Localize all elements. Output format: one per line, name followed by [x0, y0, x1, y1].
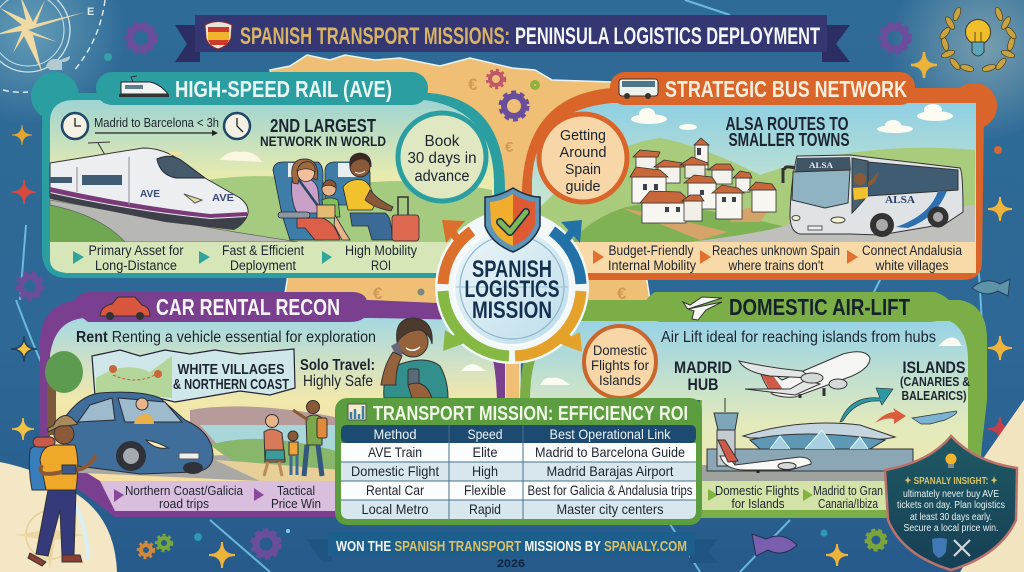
table: transport mission efficiency ROI: Madrid to Barcelona Guide [535, 444, 685, 460]
panel: strategic bus network [522, 72, 997, 280]
callout: Spanaly insight shield: tickets on day. Plan logistics [897, 500, 1005, 511]
routes heading: ALSA ROUTES TO [726, 114, 848, 134]
icon: small blue plane [912, 411, 957, 424]
feature strip: Madrid to Gran [813, 483, 883, 498]
table: transport mission efficiency ROI: Local Metro [362, 501, 429, 517]
illustration: white village [630, 138, 776, 223]
peninsula map backdrop [270, 55, 650, 400]
illustration: AVE train: AVE [140, 189, 160, 200]
feature strip: High Mobility [345, 243, 417, 258]
callout: getting around Spain guide [539, 114, 627, 202]
feature strip: Internal Mobility [608, 258, 696, 273]
icon: lightbulb with laurel [938, 6, 1018, 73]
hub label [674, 358, 732, 394]
compass rose [0, 0, 112, 92]
panel: high-speed rail [31, 72, 505, 278]
feature strip: Domestic Flights [715, 483, 799, 498]
peninsula map backdrop: € [373, 284, 383, 303]
illustration: family on train seats [273, 153, 419, 241]
header pill: STRATEGIC BUS NETWORK [665, 76, 907, 102]
peninsula map backdrop: € [617, 284, 627, 303]
callout: Spanaly insight shield [885, 436, 1017, 570]
feature strip: white villages [875, 258, 949, 273]
illustration: parked airplane [718, 440, 811, 473]
header pill: HIGH-SPEED RAIL (AVE) [175, 76, 392, 102]
islands label [900, 358, 970, 403]
feature strip [702, 481, 887, 511]
feature strip: Northern Coast/Galicia [125, 483, 244, 498]
callout: domestic flights for islands: Domestic [593, 343, 647, 358]
panel: domestic air-lift [520, 292, 987, 518]
callout: book 30 days: advance [414, 168, 470, 185]
illustration: airplane taking off [739, 352, 870, 398]
table: transport mission efficiency ROI [335, 398, 702, 525]
table: transport mission efficiency ROI: Domestic Flight [351, 463, 439, 479]
route label and arrow: Madrid to Barcelona < 3h [94, 115, 219, 130]
panel interior [532, 103, 976, 273]
callout: book 30 days [398, 113, 486, 201]
illustration: family pointing [264, 400, 327, 476]
illustration: AVE train: AVE [212, 193, 234, 204]
callout: getting around Spain guide: Spain [565, 161, 601, 178]
icon: clock left [62, 113, 88, 139]
route label and arrow [94, 115, 219, 136]
feature strip: Primary Asset for [88, 243, 184, 258]
peninsula map backdrop: € [505, 139, 514, 156]
feature strip: Connect Andalusia [862, 243, 962, 258]
callout: Spanaly insight shield: at least 30 days early. [910, 512, 992, 523]
title banner: SPANISH TRANSPORT MISSIONS: [240, 23, 510, 50]
feature strip: Fast & Efficient [222, 243, 304, 258]
center disc: SPANISH [472, 256, 552, 283]
feature strip: where trains don't [728, 258, 824, 273]
solo travel note: Solo Travel: [300, 357, 375, 374]
table: transport mission efficiency ROI: Rental Car [366, 482, 424, 498]
table: transport mission efficiency ROI: AVE Train [368, 444, 422, 460]
ring arcs [443, 231, 581, 356]
feature strip: for Islands [732, 496, 785, 511]
callout: book 30 days: 30 days in [408, 150, 476, 167]
central hub: Spanish logistics mission [435, 188, 589, 364]
solo travel note [300, 357, 375, 390]
feature strip: Canaria/Ibiza [818, 496, 879, 511]
illustration: man on phone [381, 318, 448, 398]
feature strip [560, 242, 976, 273]
illustration: AVE train [50, 142, 248, 230]
feature strip: Budget-Friendly [608, 243, 694, 258]
panel interior [50, 100, 494, 273]
table: transport mission efficiency ROI: Rapid [469, 501, 501, 517]
year: 2026 [497, 558, 525, 570]
callout: domestic flights for islands: Islands [599, 373, 641, 388]
header pill [96, 72, 428, 105]
feature strip: road trips [159, 496, 209, 511]
routes heading: SMALLER TOWNS [728, 130, 850, 150]
compass rose: E [87, 6, 94, 18]
table: transport mission efficiency ROI: Master city centers [556, 501, 664, 517]
icon: bus [619, 79, 658, 99]
table: transport mission efficiency ROI: Madrid Barajas Airport [546, 463, 674, 479]
arrow: red to islands [875, 408, 906, 424]
feature strip: Tactical [277, 483, 315, 498]
callout: getting around Spain guide: guide [566, 178, 600, 195]
callout: domestic flights for islands [584, 326, 656, 398]
icon: airplane [683, 297, 722, 320]
title banner: PENINSULA LOGISTICS DEPLOYMENT [515, 23, 820, 50]
illustration: airport terminal [707, 398, 913, 471]
network heading [260, 116, 386, 149]
callout: book 30 days: Book [424, 133, 460, 150]
header pill [644, 292, 952, 322]
illustration: folded map: & NORTHERN COAST [173, 376, 289, 393]
callout: Spanaly insight shield: ultimately never buy AVE [903, 489, 999, 500]
table: transport mission efficiency ROI: Flexible [464, 482, 506, 498]
hub label: MADRID [674, 358, 732, 377]
feature strip: ROI [371, 258, 391, 273]
panel interior [45, 318, 497, 481]
peninsula map backdrop: € [468, 75, 478, 94]
illustration: folded map [92, 349, 295, 402]
table: transport mission efficiency ROI: Best Operational Link [550, 426, 671, 442]
callout: Spanaly insight shield: ✦ SPANALY INSIGHT: ✦ [904, 475, 998, 487]
table: transport mission efficiency ROI: High [472, 463, 498, 479]
illustration: backpacker [28, 415, 96, 566]
network heading: NETWORK IN WORLD [260, 134, 386, 149]
panel: car rental recon [28, 292, 505, 566]
intro text: Air Lift ideal for reaching islands from hubs [661, 329, 936, 346]
center disc: MISSION [472, 297, 552, 324]
title banner [175, 15, 850, 62]
icon: red car [100, 297, 150, 320]
header pill [72, 292, 368, 322]
solo travel note: Highly Safe [303, 373, 373, 390]
header pill: CAR RENTAL RECON [156, 294, 340, 320]
icon: train [119, 76, 169, 97]
arrow: teal to islands [840, 388, 893, 422]
table heading: TRANSPORT MISSION: EFFICIENCY ROI [373, 403, 688, 425]
feature strip: Price Win [271, 496, 321, 511]
routes heading [726, 114, 850, 150]
network heading: 2ND LARGEST [270, 116, 376, 136]
table: transport mission efficiency ROI: Best for Galicia & Andalusia trips [528, 482, 692, 498]
icon: fish top right [972, 279, 1010, 296]
callout: getting around Spain guide: Around [560, 144, 606, 161]
feature strip: Reaches unknown Spain [712, 243, 840, 258]
illustration: blue car [63, 392, 213, 474]
header pill [610, 72, 915, 105]
illustration: folded map: WHITE VILLAGES [178, 361, 284, 378]
icon: chart [348, 404, 366, 420]
hub label: HUB [688, 375, 718, 394]
icon: shield with check [485, 188, 540, 252]
feature strip [100, 481, 340, 511]
icon: purple fish [752, 534, 797, 556]
callout: domestic flights for islands: Flights for [591, 358, 649, 373]
footer ribbon: WON THE SPANISH TRANSPORT MISSIONS BY SPANALY.COM [336, 539, 687, 555]
icon: bulb [946, 454, 956, 468]
islands label: (CANARIES & [900, 374, 970, 389]
feature strip: Long-Distance [95, 258, 177, 273]
table: transport mission efficiency ROI: Method [374, 426, 416, 442]
panel interior [530, 321, 968, 510]
center disc: LOGISTICS [464, 276, 560, 303]
table: transport mission efficiency ROI: Speed [468, 426, 502, 442]
illustration: ALSA bus [783, 155, 963, 237]
center disc [454, 229, 570, 345]
table: transport mission efficiency ROI: Elite [472, 444, 498, 460]
feature strip [50, 242, 492, 273]
intro text: Rent Renting a vehicle essential for exploration [76, 329, 376, 346]
arrow heads [442, 220, 582, 352]
icon: clock right [224, 113, 250, 139]
beach corners [0, 400, 1024, 572]
islands label: BALEARICS) [902, 388, 966, 403]
illustration: ALSA bus: ALSA [885, 195, 916, 206]
islands label: ISLANDS [902, 358, 966, 377]
callout: getting around Spain guide: Getting [560, 127, 606, 144]
icon: shield and swords [932, 538, 970, 558]
feature strip: Deployment [230, 258, 296, 273]
icon: Spanish shield [205, 22, 232, 49]
header pill: DOMESTIC AIR-LIFT [729, 294, 910, 320]
illustration: ALSA bus: ALSA [809, 161, 833, 170]
callout: Spanaly insight shield: Secure a local price win. [904, 523, 998, 534]
footer ribbon [306, 532, 718, 563]
